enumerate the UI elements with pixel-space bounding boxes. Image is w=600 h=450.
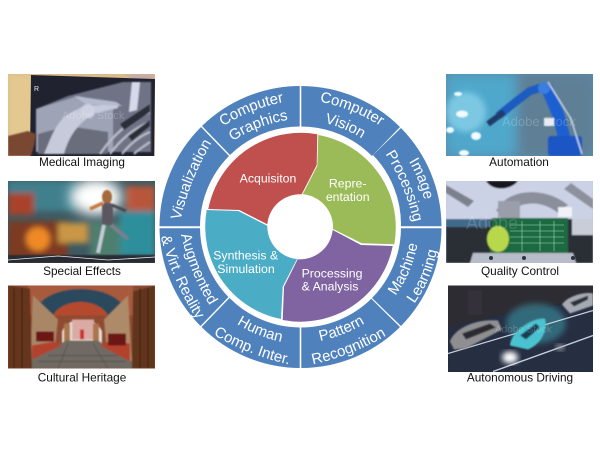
sector: Synthesis & Simulation (205, 210, 297, 319)
sector: Processing & Analysis (283, 230, 393, 322)
caption: Autonomous Driving: Autonomous Driving (467, 371, 573, 385)
image: robot arm automation: Adobe Stock (502, 114, 576, 129)
caption: Cultural Heritage: Cultural Heritage (38, 371, 127, 385)
image: cultural heritage arcade (8, 286, 155, 368)
caption: Special Effects: Special Effects (43, 264, 121, 278)
segment: Pattern Recognition (301, 298, 400, 368)
image: special effects (8, 181, 155, 263)
segment: Augmented & Virt. Reality: & Virt. Reality (161, 236, 204, 318)
segment: Computer Graphics (202, 86, 300, 155)
image: robot arm automation (446, 74, 593, 156)
sector: Representation: entation (326, 190, 370, 204)
image: autonomous driving night road: Adobe Stock (495, 324, 553, 336)
diagram: inner wheel of core processes (205, 133, 396, 322)
segment: Computer Vision: Vision (327, 112, 364, 138)
caption: Medical Imaging: Medical Imaging (39, 155, 125, 169)
image: autonomous driving night road (448, 286, 593, 372)
segment: Augmented & Virt. Reality (160, 228, 228, 326)
caption: Quality Control: Quality Control (481, 264, 559, 278)
image: medical x-ray: Adobe Stock (62, 110, 125, 122)
segment: Augmented & Virt. Reality: Augmented (180, 234, 218, 305)
sector: Synthesis & Simulation: Simulation (217, 262, 275, 276)
sector: Acquisiton (208, 133, 317, 224)
image: circuit board quality control: Adobe (466, 213, 518, 233)
image: medical x-ray: R (34, 86, 39, 93)
sector: Representation: Repre- (329, 177, 366, 191)
segment: Machine Learning: Learning (406, 250, 439, 303)
sector: Processing & Analysis: & Analysis (302, 280, 358, 294)
segment: Image Processing: Processing (386, 150, 421, 222)
segment: Computer Vision (301, 86, 400, 156)
segment: Visualization: Visualization (170, 140, 212, 218)
segment: Visualization (160, 127, 229, 226)
sector: Processing & Analysis: Processing (302, 266, 363, 280)
sector: Synthesis & Simulation: Synthesis & (213, 248, 279, 262)
segment: Computer Vision: Computer (321, 92, 384, 124)
segment: Pattern Recognition: Recognition (312, 330, 386, 364)
segment: Human Comp. Inter.: Comp. Inter. (216, 328, 288, 364)
segment: Computer Graphics: Computer (220, 94, 282, 124)
diagram: outer ring of application fields (160, 86, 442, 368)
image: medical x-ray (8, 74, 155, 156)
segment: Human Comp. Inter. (202, 298, 300, 368)
segment: Image Processing (373, 128, 442, 226)
sector: Representation (303, 135, 396, 244)
segment: Pattern Recognition: Pattern (318, 318, 364, 341)
segment: Human Comp. Inter.: Human (238, 316, 282, 342)
segment: Machine Learning: Machine (388, 244, 417, 295)
segment: Image Processing: Image (410, 157, 432, 199)
segment: Computer Graphics: Graphics (230, 112, 288, 140)
sector: Acquisiton: Acquisiton (240, 172, 297, 186)
image: circuit board quality control (446, 181, 593, 263)
caption: Automation: Automation (489, 155, 549, 169)
segment: Machine Learning (372, 228, 442, 326)
